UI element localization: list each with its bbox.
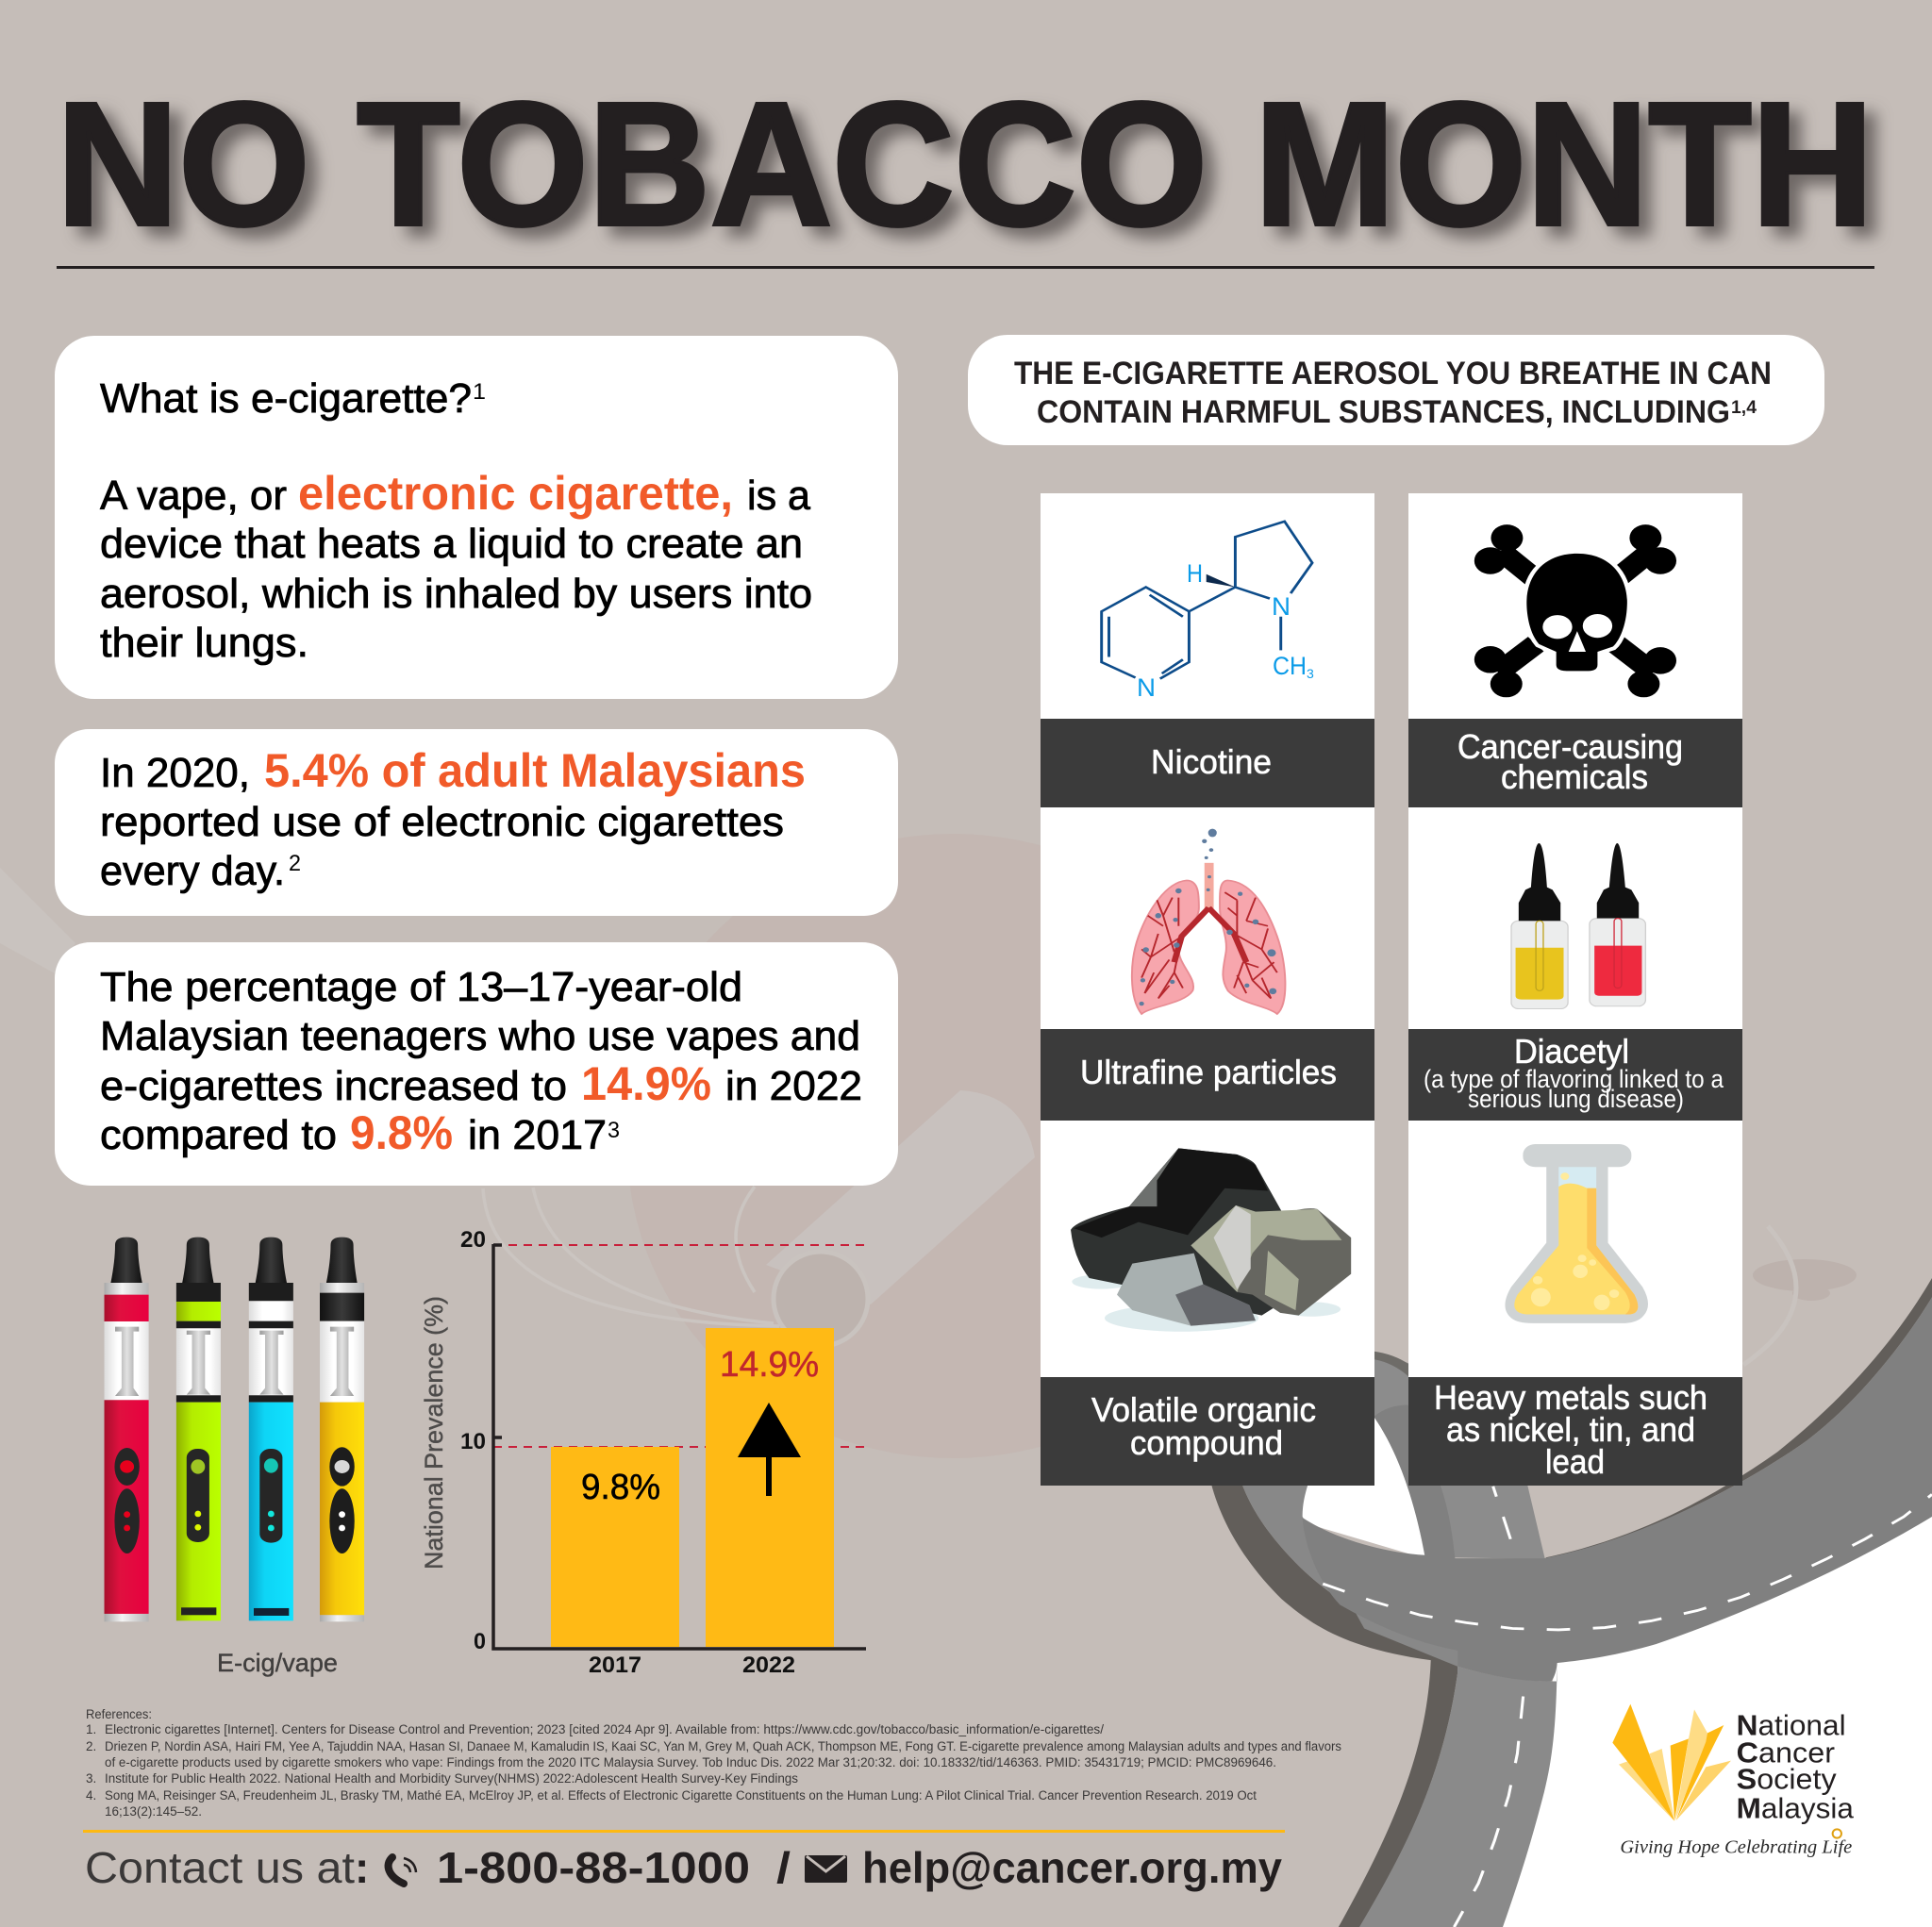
definition text (100, 467, 812, 666)
icon: mail (805, 1855, 847, 1883)
panel: teen prevalence: 9.8% (350, 1106, 453, 1159)
label: heavy metals: Heavy metals such (1434, 1378, 1707, 1417)
definition text: aerosol, which is inhaled by users into (100, 571, 812, 617)
contact line: Contact us at (85, 1843, 355, 1892)
panel: teen prevalence: compared to (100, 1112, 337, 1158)
card: cancer-causing chemicals (1408, 493, 1742, 807)
card: volatile organic compound (1041, 1121, 1374, 1486)
icon: skull and crossbones (1474, 524, 1676, 697)
panel: teen prevalence (55, 942, 898, 1186)
logo wordmark: National (1737, 1709, 1846, 1741)
panel: harmful substances heading (968, 335, 1824, 445)
panel: harmful substances heading: 1,4 (1731, 398, 1757, 418)
panel: adult prevalence: every day. (100, 848, 285, 894)
panel: teen prevalence: The percentage of 13–17-year-old (100, 964, 742, 1010)
definition text: is a (747, 473, 811, 519)
winding road illustration (1211, 1278, 1932, 1927)
panel: teen prevalence: in 2022 (725, 1063, 862, 1109)
faded cigarette background motif (0, 834, 1857, 1458)
card: nicotine (1041, 493, 1374, 807)
y-axis ticks: 0 (474, 1629, 486, 1654)
panel: harmful substances heading: CONTAIN HARMFUL SUBSTANCES, INCLUDING (1037, 394, 1730, 430)
definition text: electronic cigarette, (298, 467, 733, 520)
references (86, 1707, 1341, 1819)
icon: flask (1505, 1144, 1648, 1323)
label: volatile organic compound: Volatile organic (1091, 1390, 1316, 1429)
vape: green (176, 1238, 221, 1620)
label: volatile organic compound (1091, 1390, 1316, 1462)
label: diacetyl: serious lung disease) (1468, 1085, 1684, 1113)
icon: nicotine molecule: H (1187, 559, 1203, 588)
panel: adult prevalence (55, 729, 898, 916)
x-axis labels (589, 1653, 795, 1678)
references: 4. (86, 1788, 96, 1802)
logo wordmark (1737, 1709, 1855, 1824)
panel: teen prevalence: 3 (608, 1118, 620, 1143)
panel: adult prevalence: reported use of electronic cigarettes (100, 799, 784, 845)
label: heavy metals (1434, 1378, 1707, 1481)
vape: yellow (320, 1238, 364, 1621)
vape caption: E-cig/vape (217, 1649, 338, 1677)
illustration: four e-cigarettes (105, 1238, 364, 1621)
vape: red (105, 1238, 149, 1621)
icon: phone (389, 1857, 416, 1884)
references: of e-cigarette products used by cigarette smokers who vape: Findings from the 2020 ITC Malaysia Survey. Tob Induc Dis. 2022 Mar 31;20:32. doi: 10.18332/tid/146363. PMID: 35431719; PMCID: PMC8969646. (105, 1755, 1276, 1769)
logo tagline: Giving Hope Celebrating Life (1620, 1836, 1852, 1857)
y-axis title: National Prevalence (%) (420, 1296, 448, 1570)
icon: lungs (1132, 829, 1285, 1014)
panel: adult prevalence: In 2020, (100, 750, 250, 796)
panel: adult prevalence: 2 (289, 851, 301, 876)
panel: teen prevalence: 14.9% (581, 1057, 711, 1110)
title: NO TOBACCO MONTH (57, 67, 1874, 262)
panel: adult prevalence: 5.4% of adult Malaysians (264, 744, 806, 797)
value: 14.9%: 14.9% (720, 1345, 819, 1385)
label: diacetyl: Diacetyl (1514, 1032, 1629, 1071)
contact line: 1-800-88-1000 (437, 1843, 750, 1892)
panel: teen prevalence: Malaysian teenagers who use vapes and (100, 1013, 860, 1059)
label: cancer-causing chemicals: chemicals (1501, 757, 1648, 796)
panel: teen prevalence: in 2017 (468, 1112, 607, 1158)
icon: nicotine molecule: CH (1273, 652, 1307, 680)
x-axis labels: 2017 (589, 1653, 641, 1678)
logo wordmark: Cancer (1737, 1736, 1835, 1769)
x-axis labels: 2022 (742, 1653, 795, 1678)
label: nicotine: Nicotine (1151, 742, 1272, 781)
panel: harmful substances heading: THE E-CIGARETTE AEROSOL YOU BREATHE IN CAN (1014, 356, 1772, 391)
references: 16;13(2):145–52. (105, 1804, 202, 1819)
card: diacetyl (1408, 807, 1742, 1121)
references: References: (86, 1707, 152, 1721)
y-axis ticks: 10 (460, 1429, 486, 1454)
card: heavy metals (1408, 1121, 1742, 1486)
references: 1. (86, 1722, 96, 1736)
icon: nicotine molecule: 3 (1307, 666, 1314, 681)
logo wordmark: Malaysia (1737, 1792, 1855, 1824)
references: Institute for Public Health 2022. National Health and Morbidity Survey(NHMS) 2022:Adolescent Health Survey-Key Findings (105, 1771, 798, 1786)
value: 9.8%: 9.8% (581, 1468, 660, 1507)
icon: nicotine molecule: N (1137, 673, 1156, 702)
bar chart: national prevalence (420, 1227, 866, 1678)
vape: blue (249, 1238, 293, 1620)
label: heavy metals: lead (1545, 1442, 1605, 1481)
panel: teen prevalence: e-cigarettes increased to (100, 1063, 567, 1109)
question heading: What is e-cigarette? (100, 375, 472, 422)
card: ultrafine particles (1041, 807, 1374, 1121)
bar: 2022 (706, 1328, 834, 1647)
y-axis ticks: 20 (460, 1227, 486, 1253)
definition text: their lungs. (100, 620, 308, 666)
icon: nicotine molecule: N (1272, 592, 1291, 621)
label: cancer-causing chemicals: Cancer-causing (1457, 727, 1683, 766)
arrow: increase (738, 1403, 801, 1496)
label: ultrafine particles: Ultrafine particles (1080, 1053, 1337, 1091)
references: Electronic cigarettes [Internet]. Centers for Disease Control and Prevention; 2023 [cited 2024 Apr 9]. Available from: https://www.cdc.gov/tobacco/basic_information/e-cigarettes/ (105, 1722, 1104, 1736)
definition text: A vape, or (100, 473, 287, 519)
label: diacetyl (1424, 1032, 1724, 1113)
label: diacetyl: (a type of flavoring linked to a (1424, 1065, 1724, 1093)
contact line: : (355, 1843, 369, 1892)
panel: what is e-cigarette: 1 (473, 379, 486, 405)
label: volatile organic compound: compound (1130, 1423, 1283, 1462)
definition text: device that heats a liquid to create an (100, 521, 803, 567)
contact line: help@cancer.org.my (862, 1843, 1282, 1892)
logo wordmark: Society (1737, 1764, 1837, 1796)
label: heavy metals: as nickel, tin, and (1446, 1410, 1695, 1449)
references: Song MA, Reisinger SA, Freudenheim JL, Brasky TM, Mathé EA, McElroy JP, et al. Effects of Electronic Cigarette Constituents on the Human Lung: A Pilot Clinical Trial. Cancer Prevention Research. 2019 Oct (105, 1788, 1257, 1802)
references: 3. (86, 1771, 96, 1786)
y-axis ticks (460, 1227, 486, 1654)
contact line (85, 1843, 1282, 1892)
bar: 2017 (551, 1447, 679, 1647)
references: Driezen P, Nordin ASA, Hairi FM, Yee A, Tajuddin NAA, Hasan SI, Danaee M, Kamaludin IS, Kaai SC, Yan M, Grey M, Quah ACK, Thompson ME, Fong GT. E-cigarette prevalence among Malaysian adults and types and flavors (105, 1739, 1341, 1753)
icon: rocks (1071, 1148, 1351, 1332)
references: 2. (86, 1739, 96, 1753)
panel: what is e-cigarette (55, 336, 898, 699)
icon: e-liquid bottles (1511, 843, 1645, 1009)
icon: nicotine molecule (1102, 522, 1314, 702)
logo: National Cancer Society Malaysia (1612, 1704, 1855, 1857)
label: cancer-causing chemicals (1457, 727, 1683, 796)
contact line: / (776, 1843, 791, 1892)
logo mark: fan (1612, 1704, 1731, 1821)
